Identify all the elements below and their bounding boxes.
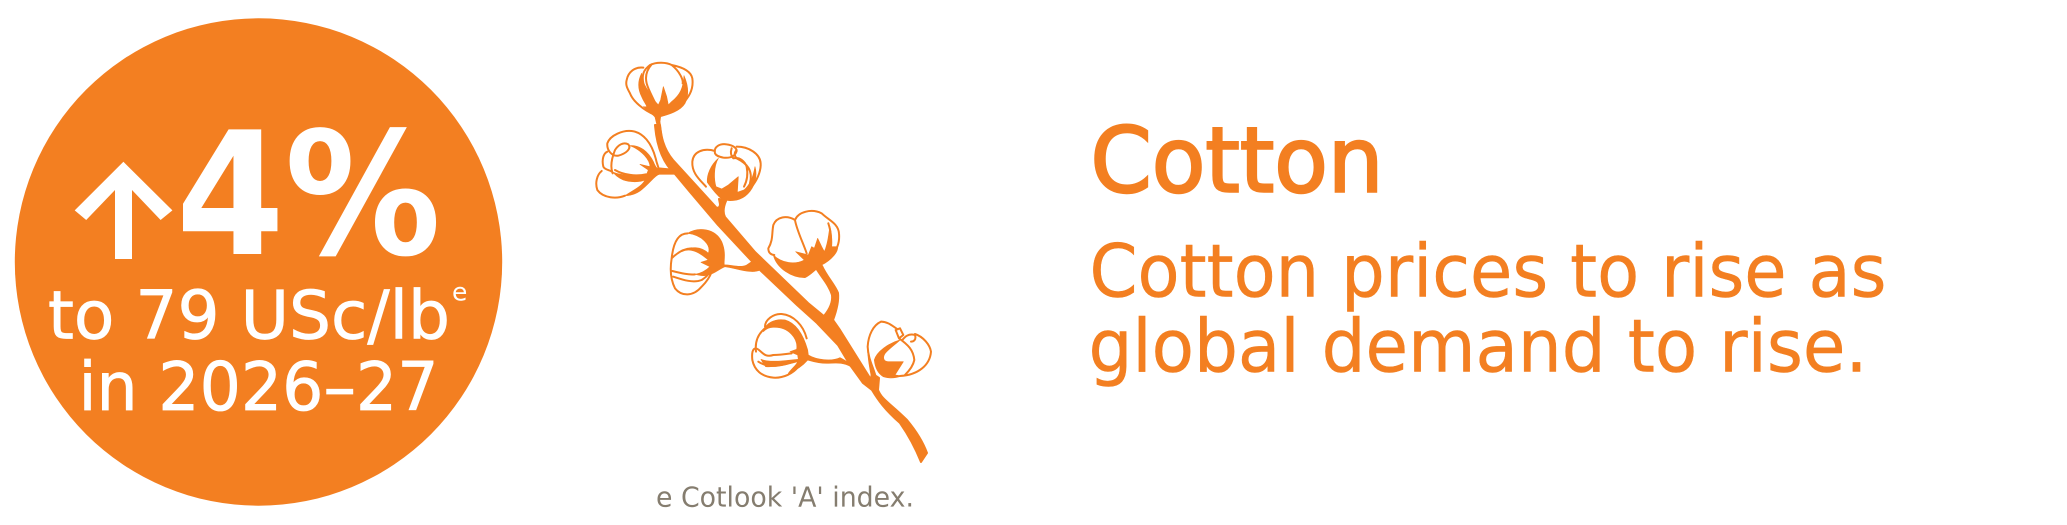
side stem for boll 4 [816,266,838,320]
body text [1088,230,1886,390]
boll 6 [752,314,858,378]
price text: to 79 USc/lb [48,276,450,354]
boll 4 [768,211,839,278]
body line 1: Cotton prices to rise as [1090,230,1886,315]
branch stem [655,125,927,462]
boll 7 [868,322,931,390]
icon: cotton branch [596,63,931,462]
orange circle [15,18,502,506]
boll 1 [626,63,693,140]
panel: forecast badge [15,18,502,506]
body line 2: global demand to rise. [1088,305,1868,390]
footnote: e Cotlook 'A' index. [656,481,914,514]
boll 2 [596,131,675,198]
year text: in 2026–27 [78,348,438,426]
heading: Cotton [1090,109,1384,214]
boll 5 [671,230,760,294]
footnote marker: e [452,278,467,306]
headline figure: 4% [176,96,441,295]
icon: up arrow [75,162,172,259]
boll 3 [692,144,761,201]
